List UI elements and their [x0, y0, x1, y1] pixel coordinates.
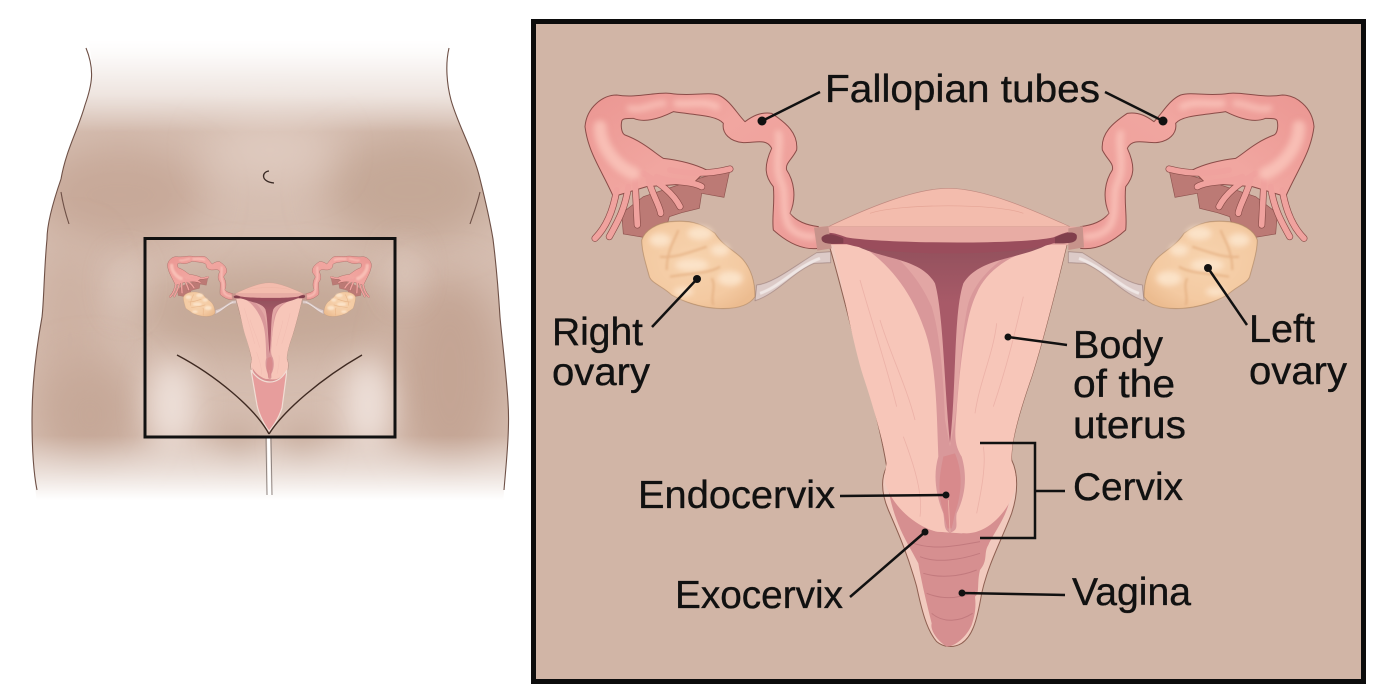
panel: body overview	[0, 40, 530, 510]
label: Exocervix	[675, 528, 928, 617]
midline	[266, 438, 272, 495]
label: Right ovary: ovary	[552, 351, 651, 394]
body outline	[32, 48, 509, 490]
pelvic creases	[177, 355, 362, 434]
locator box	[145, 238, 395, 437]
left fallopian tube and ovary	[1068, 93, 1314, 309]
label: Left ovary: ovary	[1249, 350, 1348, 393]
label: Body of the uterus	[1004, 324, 1186, 447]
label: Body of the uterus: of the	[1073, 363, 1175, 406]
label: Exocervix: Exocervix	[675, 574, 843, 617]
label: Body of the uterus: uterus	[1073, 404, 1186, 447]
label: Right ovary: Right	[552, 311, 643, 354]
panel: detail anatomy	[534, 22, 1364, 682]
anatomy inset small	[167, 256, 372, 431]
label: Endocervix	[638, 474, 950, 517]
label: Cervix with bracket	[980, 443, 1183, 538]
label: Fallopian tubes	[758, 68, 1168, 126]
label: Right ovary	[552, 275, 701, 394]
label: Cervix with bracket: Cervix	[1073, 466, 1183, 509]
navel	[264, 171, 274, 183]
label: Left ovary	[1204, 264, 1348, 393]
uterus	[814, 188, 1084, 647]
label: Fallopian tubes: Fallopian tubes	[825, 68, 1100, 111]
detail background	[534, 22, 1364, 682]
label: Endocervix: Endocervix	[638, 474, 835, 517]
body skin shading	[32, 59, 508, 494]
right fallopian tube and ovary	[585, 93, 831, 309]
label: Vagina: Vagina	[1072, 571, 1191, 614]
label: Body of the uterus: Body	[1073, 324, 1163, 367]
label: Left ovary: Left	[1249, 308, 1315, 351]
label: Vagina	[958, 571, 1191, 614]
